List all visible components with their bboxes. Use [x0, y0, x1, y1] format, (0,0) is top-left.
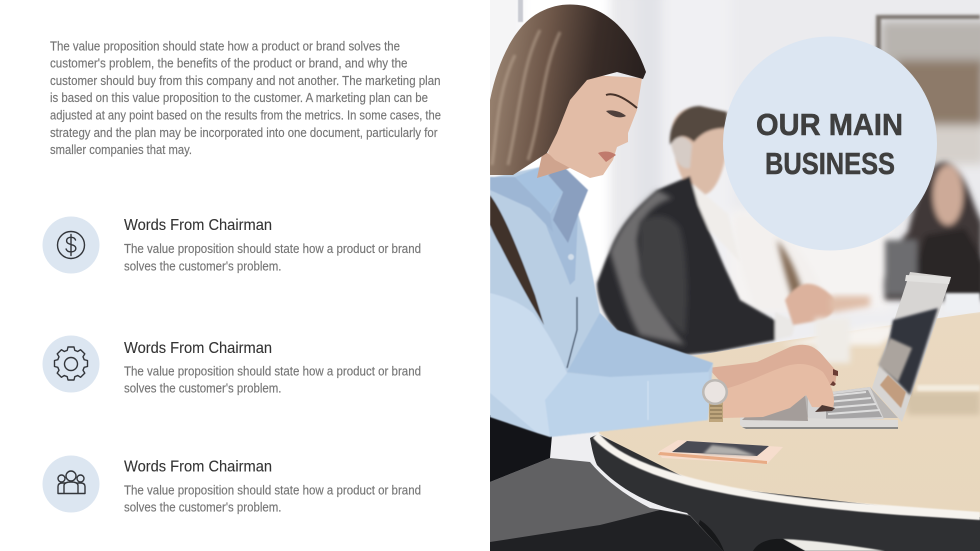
description: solves the customer's problem.	[124, 501, 282, 515]
description: solves the customer's problem.	[124, 259, 282, 273]
upper arm	[490, 293, 567, 437]
description: The value proposition should state how a product or brand	[124, 364, 421, 378]
table	[590, 293, 980, 551]
description: The value proposition should state how a product or brand	[124, 242, 421, 256]
icon: dollar coin	[42, 216, 100, 274]
description: The value proposition should state how a product or brand	[124, 483, 421, 497]
intro paragraph: customer's problem, the benefits of the product or brand, and why the	[50, 57, 408, 71]
blurred woman in background	[884, 162, 980, 300]
laptop	[740, 272, 951, 429]
description	[124, 242, 421, 273]
shirt placket shadow	[545, 193, 578, 285]
heading: Words From Chairman	[124, 458, 272, 476]
man in dark jacket	[597, 106, 870, 355]
description	[124, 483, 421, 515]
table underside	[590, 434, 980, 551]
description	[124, 364, 421, 396]
blurred colleague in white shirt	[772, 237, 806, 296]
torso and shirt	[490, 165, 713, 437]
heading: Words From Chairman	[124, 217, 272, 234]
item: team	[42, 456, 421, 515]
title text	[756, 107, 903, 181]
table edge	[593, 432, 980, 520]
lower body: skirt and trousers	[490, 415, 723, 551]
lower sleeve	[550, 421, 692, 438]
hair strand	[490, 195, 544, 325]
item: dollar	[42, 216, 421, 274]
item: gear	[42, 336, 421, 396]
title text: OUR MAIN	[756, 107, 903, 142]
description: solves the customer's problem.	[124, 382, 282, 396]
smartphone	[658, 440, 783, 464]
intro paragraph: smaller companies that may.	[50, 143, 192, 157]
panel: left text column	[0, 0, 490, 551]
forearm	[567, 313, 713, 377]
title circle	[723, 36, 937, 250]
collar	[515, 167, 563, 213]
watch	[702, 379, 728, 422]
icon: gear	[42, 336, 100, 392]
intro paragraph: customer should buy from this company and not another. The marketing plan	[50, 74, 440, 88]
intro paragraph: is based on this value proposition to the customer. A marketing plan can be	[50, 91, 428, 105]
icon: team	[42, 456, 100, 512]
hands and forearm	[708, 345, 838, 418]
intro paragraph	[50, 39, 441, 157]
intro paragraph: strategy and the plan may be incorporated into one document, particularly for	[50, 126, 438, 140]
face and hair	[490, 4, 646, 178]
heading: Words From Chairman	[124, 340, 272, 357]
intro paragraph: adjusted at any point based on the results from the metrics. In some cases, the	[50, 108, 441, 122]
photo: businesswoman typing on a laptop at a meeting table	[480, 0, 980, 551]
intro paragraph: The value proposition should state how a product or brand solves the	[50, 39, 400, 53]
title text: BUSINESS	[765, 146, 895, 181]
